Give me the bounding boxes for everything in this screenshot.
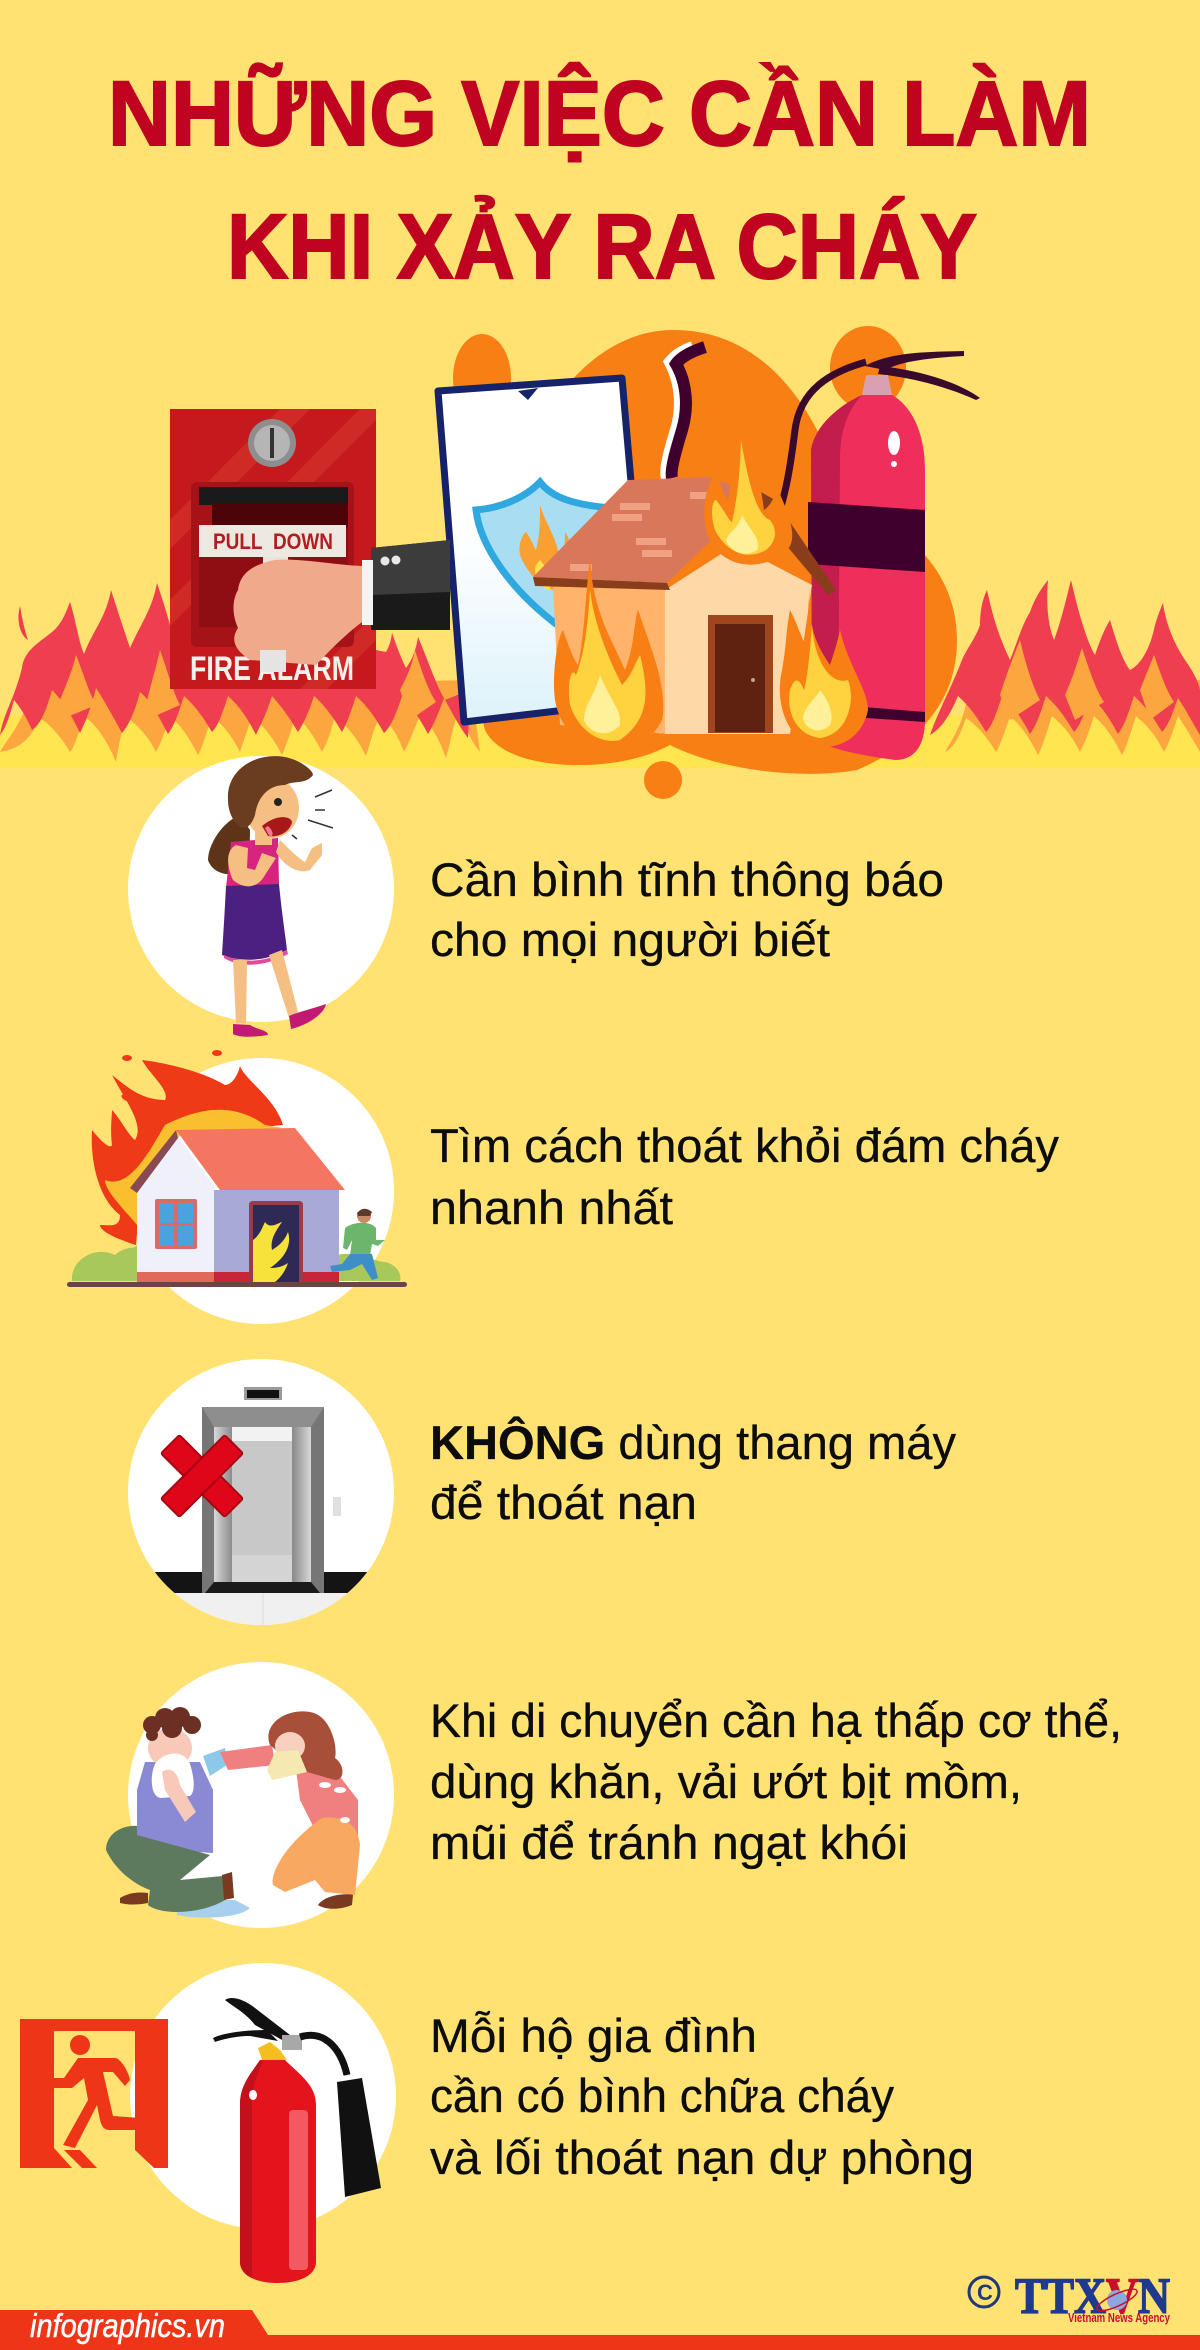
text: Mỗi hộ gia đình <box>430 2009 757 2062</box>
icon: extinguisher in hero <box>666 347 980 760</box>
icon: hand pulling alarm <box>234 540 450 672</box>
flame: left <box>554 557 663 748</box>
text: Tìm cách thoát khỏi đám cháy <box>430 1119 1059 1172</box>
text <box>430 1694 1122 1869</box>
icon: fire alarm box <box>170 409 376 689</box>
text: Khi di chuyển cần hạ thấp cơ thể, <box>430 1694 1122 1747</box>
step 3 <box>100 1359 956 1633</box>
icon: fire alarm box: FIRE ALARM <box>190 650 354 688</box>
text: dùng khăn, vải ướt bịt mồm, <box>430 1755 1022 1808</box>
hero illustration: orange blob <box>453 326 957 799</box>
logo: TTXVN: C <box>977 2280 993 2305</box>
text: cần có bình chữa cháy <box>430 2069 894 2122</box>
step 1 <box>128 756 944 1037</box>
white circle <box>128 1662 394 1928</box>
text: KHÔNG dùng thang máy <box>430 1416 956 1469</box>
icon: phone with shield <box>438 378 650 722</box>
icon: burning house with runner <box>67 1050 407 1287</box>
icon: fire alarm box: PULL DOWN <box>213 529 333 554</box>
text: và lối thoát nạn dự phòng <box>430 2131 974 2184</box>
icon: burning house <box>533 397 868 748</box>
text <box>430 1416 956 1529</box>
white circle <box>128 1359 394 1625</box>
text: mũi để tránh ngạt khói <box>430 1816 908 1869</box>
flame: middle <box>704 397 792 565</box>
title: NHỮNG VIỆC CẦN LÀM <box>108 62 1091 165</box>
icon: woman with wet towel <box>203 1711 360 1909</box>
text: để thoát nạn <box>430 1476 697 1529</box>
icon: exit sign <box>20 2019 168 2168</box>
white circle <box>130 1963 396 2229</box>
footer bar <box>0 2307 1200 2350</box>
icon: girl shouting <box>208 756 333 1037</box>
door <box>249 1201 303 1282</box>
icon: red extinguisher <box>213 1998 381 2283</box>
fire band: left and right flames <box>0 580 1200 768</box>
text <box>430 853 944 966</box>
door <box>708 615 773 733</box>
window <box>155 1199 197 1249</box>
text <box>430 1119 1059 1234</box>
title <box>108 62 1091 298</box>
key lock <box>248 419 296 467</box>
step 2 <box>67 1050 1059 1324</box>
icon: elevator with red cross <box>154 1387 368 1625</box>
icon: man covering mouth <box>106 1707 250 1918</box>
text: cho mọi người biết <box>430 913 830 966</box>
white circle <box>128 756 394 1022</box>
flame: right <box>780 583 868 747</box>
step 4 <box>106 1662 1122 1928</box>
runner <box>330 1209 385 1280</box>
step 5 <box>20 1963 974 2283</box>
handle <box>263 555 288 575</box>
logo: TTXVN: TTXVN <box>1015 2269 1170 2325</box>
text: Cần bình tĩnh thông báo <box>430 853 944 906</box>
text: nhanh nhất <box>430 1181 673 1234</box>
text <box>430 2009 974 2184</box>
footer bar: infographics.vn <box>30 2307 225 2344</box>
title: KHI XẢY RA CHÁY <box>227 195 977 298</box>
white circle <box>128 1058 394 1324</box>
